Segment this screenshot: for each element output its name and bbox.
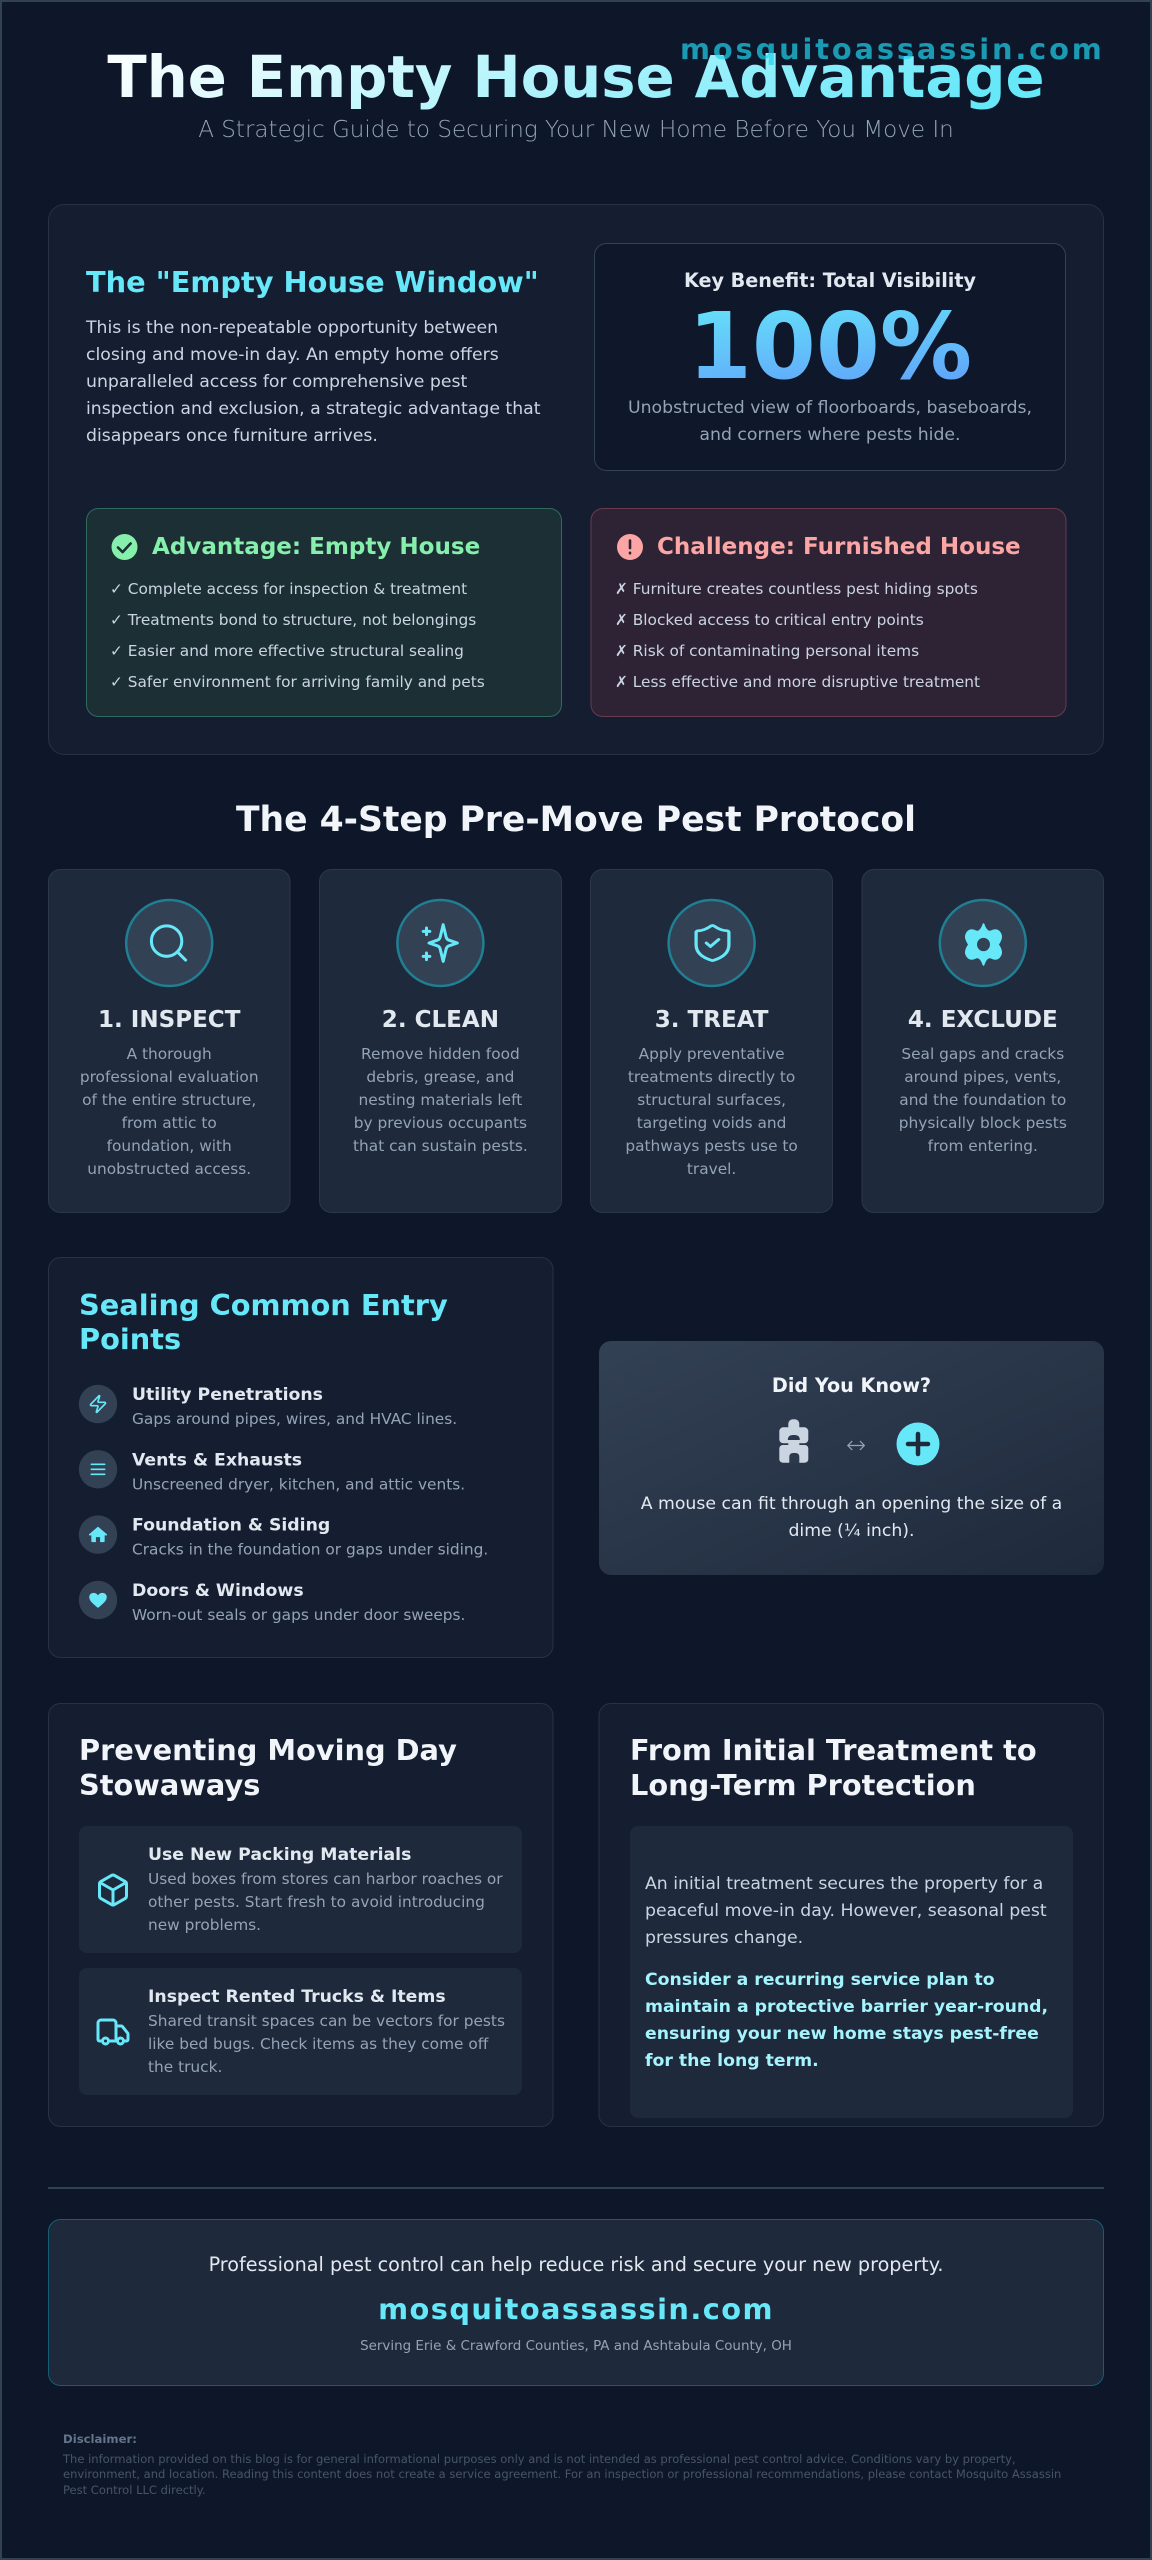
step text: Seal gaps and cracks — [901, 1045, 1064, 1063]
entry: utility — [79, 1385, 457, 1428]
list: advantages: ✓ Easier and more effective structural sealing — [110, 642, 464, 660]
intro text: closing and move-in day. An empty home offers — [86, 345, 499, 365]
entry: vents — [79, 1450, 465, 1493]
protection text box: pressures change. — [645, 1928, 803, 1948]
list: challenges: ✗ Less effective and more disruptive treatment — [615, 673, 980, 691]
step text: travel. — [687, 1160, 736, 1178]
big number: 100% — [688, 293, 972, 400]
step text — [625, 1045, 798, 1178]
disclaimer: environment, and location. Reading this content does not create a service agreement. For an inspection or professional recommendations, please contact Mosquito Assassin — [63, 2467, 1061, 2481]
icon: box — [100, 1875, 126, 1905]
heading: stowaways: Preventing Moving Day — [79, 1733, 457, 1767]
entry: foundation: Cracks in the foundation or gaps under siding. — [132, 1541, 488, 1559]
heading: stowaways: Stowaways — [79, 1768, 260, 1802]
panel: entry points — [48, 1258, 553, 1658]
list: advantages — [110, 580, 485, 691]
icon: magnifier — [126, 900, 212, 986]
protection text box: peaceful move-in day. However, seasonal pest — [645, 1901, 1047, 1921]
entry: foundation — [79, 1515, 488, 1559]
step text: foundation, with — [107, 1137, 232, 1155]
step text: that can sustain pests. — [353, 1137, 528, 1155]
subtitle: A Strategic Guide to Securing Your New Home Before You Move In — [198, 117, 954, 143]
step text: and the foundation to — [899, 1091, 1066, 1109]
watermark url: mosquitoassassin.com — [680, 32, 1105, 66]
icon: size arrow: ↔ — [846, 1431, 866, 1459]
step card: clean — [320, 870, 562, 1212]
entry: vents: Vents & Exhausts — [132, 1450, 302, 1470]
panel: challenge — [591, 508, 1066, 716]
entry: doors — [79, 1581, 465, 1624]
step text: treatments directly to — [628, 1068, 795, 1086]
tip: packing materials: Used boxes from stores can harbor roaches or — [148, 1870, 503, 1888]
protection text box: for the long term. — [645, 2051, 819, 2071]
list: advantages: ✓ Treatments bond to structure, not belongings — [110, 611, 476, 629]
key benefit callout — [594, 244, 1066, 470]
tip: packing materials — [79, 1826, 522, 1953]
intro text: disappears once furniture arrives. — [86, 426, 378, 446]
step text — [353, 1045, 528, 1155]
step text: professional evaluation — [80, 1068, 259, 1086]
call to action — [48, 2220, 1104, 2386]
list: challenges: ✗ Blocked access to critical entry points — [615, 611, 924, 629]
panel: moving day stowaways — [48, 1704, 553, 2126]
step text: Remove hidden food — [361, 1045, 520, 1063]
step text: of the entire structure, — [82, 1091, 256, 1109]
step card: exclude — [862, 870, 1104, 1212]
header — [107, 32, 1105, 143]
icon: truck — [98, 2020, 128, 2044]
key benefit callout: Unobstructed view of floorboards, baseboards, — [628, 398, 1032, 418]
protection text box: Consider a recurring service plan to — [645, 1970, 995, 1990]
tip: rented trucks — [79, 1968, 522, 2095]
step text: by previous occupants — [354, 1114, 527, 1132]
key benefit callout: and corners where pests hide. — [699, 425, 961, 445]
step text: pathways pests use to — [625, 1137, 798, 1155]
panel: advantage — [86, 508, 562, 716]
icon: alert circle — [617, 534, 643, 560]
entry: vents: Unscreened dryer, kitchen, and attic vents. — [132, 1475, 465, 1493]
icon: check circle — [112, 534, 138, 560]
intro text: unparalleled access for comprehensive pest — [86, 372, 467, 392]
panel: empty house window — [48, 204, 1104, 754]
tip: packing materials: other pests. Start fresh to avoid introducing — [148, 1893, 485, 1911]
tip: rented trucks: the truck. — [148, 2058, 222, 2076]
heading: long-term protection: Long-Term Protection — [630, 1768, 976, 1802]
icon: dime — [896, 1422, 940, 1466]
call to action: mosquitoassassin.com — [378, 2292, 774, 2326]
step text — [899, 1045, 1067, 1155]
call to action: Professional pest control can help reduce risk and secure your new property. — [209, 2253, 943, 2276]
step card: clean: 2. CLEAN — [382, 1007, 499, 1033]
list: challenges: ✗ Furniture creates countless pest hiding spots — [615, 580, 978, 598]
tip: packing materials: new problems. — [148, 1916, 261, 1934]
intro text: This is the non-repeatable opportunity between — [85, 318, 498, 338]
step text: physically block pests — [899, 1114, 1067, 1132]
heading: long-term protection: From Initial Treatment to — [630, 1733, 1037, 1767]
disclaimer: The information provided on this blog is for general informational purposes only and is not intended as professional pest control advice. Conditions vary by property, — [62, 2452, 1016, 2466]
icon: gear — [940, 900, 1026, 986]
list: challenges: ✗ Risk of contaminating personal items — [615, 642, 919, 660]
heading: advantage: Advantage: Empty House — [152, 534, 480, 560]
tip: rented trucks: Shared transit spaces can be vectors for pests — [148, 2012, 505, 2030]
heading: challenge: Challenge: Furnished House — [657, 534, 1021, 560]
step card: inspect: 1. INSPECT — [98, 1007, 241, 1033]
title: The Empty House Advantage — [107, 44, 1045, 111]
step text: around pipes, vents, — [904, 1068, 1061, 1086]
step card: treat — [590, 870, 832, 1212]
icon: sparkles — [397, 900, 483, 986]
entry: utility: Utility Penetrations — [132, 1385, 323, 1405]
entry: doors: Worn-out seals or gaps under door sweeps. — [132, 1606, 465, 1624]
call to action: Serving Erie & Crawford Counties, PA and Ashtabula County, OH — [360, 2339, 792, 2354]
callout: did you know: dime (¼ inch). — [788, 1521, 915, 1541]
step text: from entering. — [928, 1137, 1038, 1155]
step text: targeting voids and — [637, 1114, 786, 1132]
step card: treat: 3. TREAT — [655, 1007, 769, 1033]
icon: shield check — [669, 900, 755, 986]
disclaimer — [48, 2390, 1104, 2512]
list: advantages: ✓ Complete access for inspection & treatment — [110, 580, 467, 598]
disclaimer: Pest Control LLC directly. — [63, 2483, 206, 2497]
tip: packing materials: Use New Packing Materials — [148, 1845, 411, 1865]
heading: empty house window: The "Empty House Window" — [86, 265, 539, 299]
list: advantages: ✓ Safer environment for arriving family and pets — [110, 673, 485, 691]
step text: unobstructed access. — [87, 1160, 251, 1178]
step text: debris, grease, and — [366, 1068, 514, 1086]
callout: did you know: A mouse can fit through an opening the size of a — [641, 1494, 1062, 1514]
entry: utility: Gaps around pipes, wires, and HVAC lines. — [132, 1410, 457, 1428]
panel: long-term protection — [599, 1704, 1104, 2126]
step text: Apply preventative — [639, 1045, 785, 1063]
callout: did you know: Did You Know? — [772, 1374, 931, 1397]
list: challenges — [615, 580, 980, 691]
intro text — [85, 318, 541, 446]
protection text box: maintain a protective barrier year-round, — [645, 1997, 1048, 2017]
protection text box: An initial treatment secures the property for a — [645, 1874, 1043, 1894]
protection text box — [630, 1826, 1073, 2118]
step text: structural surfaces, — [637, 1091, 786, 1109]
tip: rented trucks: Inspect Rented Trucks & Items — [148, 1987, 446, 2007]
callout: did you know — [599, 1341, 1104, 1575]
heading: entry points: Sealing Common Entry — [79, 1288, 448, 1322]
protection text box: ensuring your new home stays pest-free — [645, 2024, 1039, 2044]
entry: doors: Doors & Windows — [132, 1581, 304, 1601]
step text: A thorough — [127, 1045, 212, 1063]
heading: 4-step protocol: The 4-Step Pre-Move Pest Protocol — [236, 800, 916, 840]
disclaimer: Disclaimer: — [63, 2432, 137, 2446]
step card: inspect — [48, 870, 290, 1212]
step card: exclude: 4. EXCLUDE — [908, 1007, 1058, 1033]
entry: foundation: Foundation & Siding — [132, 1516, 330, 1536]
key benefit callout: Key Benefit: Total Visibility — [684, 269, 977, 292]
step text — [80, 1045, 259, 1178]
step text: from attic to — [122, 1114, 217, 1132]
step text: nesting materials left — [359, 1091, 522, 1109]
intro text: inspection and exclusion, a strategic advantage that — [86, 399, 541, 419]
icon: mouse — [779, 1419, 808, 1463]
tip: rented trucks: like bed bugs. Check items as they come off — [148, 2035, 489, 2053]
heading: entry points: Points — [79, 1322, 181, 1356]
